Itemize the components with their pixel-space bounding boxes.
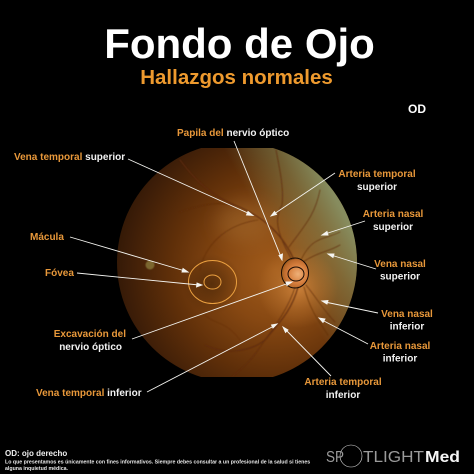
pointer arrows [70,141,378,392]
footnote: OD: ojo derecho [5,449,67,458]
label: arteria nasal inferior: inferior [383,354,417,364]
label: fovea: Fóvea [45,268,74,279]
optic disc outline [282,258,308,288]
label: arteria temporal superior: Arteria temporal [338,169,416,180]
label: vena temporal superior: Vena temporal superior [14,152,125,163]
logo: SpotlightMed [326,445,460,467]
label: arteria temporal inferior: inferior [326,390,360,401]
label: arteria nasal inferior: Arteria nasal [370,341,430,352]
label: vena nasal superior: Vena nasal [374,259,426,270]
label: arteria temporal superior: superior [357,182,397,193]
optic cup outline [288,267,304,281]
fundus photograph [117,142,357,382]
footnote: alguna inquietud médica. [5,466,69,472]
logo: SpotlightMed: TLIGHT [363,449,424,466]
fovea ring [204,275,221,289]
optic disc [284,259,308,287]
label: arteria nasal superior: superior [373,222,413,233]
eye label OD: OD [408,102,426,116]
macula ring [188,260,236,304]
logo: SpotlightMed: SP [326,449,344,466]
label: papila: Papila del nervio óptico [177,128,289,139]
label: vena nasal inferior: inferior [390,322,424,332]
footnote [5,449,310,472]
label: macula: Mácula [30,232,64,243]
label: excavacion: Excavación del [54,329,126,340]
title: Fondo de Ojo [104,20,375,67]
label: arteria nasal superior: Arteria nasal [363,209,423,220]
pale spot [146,260,154,270]
label: arteria temporal inferior: Arteria temporal [304,377,382,388]
footnote: Lo que presentamos es únicamente con fines informativos. Siempre debes consultar a un profesional de la salud si tienes [5,460,310,466]
label: vena temporal inferior: Vena temporal inferior [36,388,142,399]
blood vessels [180,150,340,351]
label: vena nasal inferior: Vena nasal [381,309,433,320]
logo: SpotlightMed: Med [425,449,460,466]
subtitle: Hallazgos normales [140,66,333,89]
label: excavacion: nervio óptico [59,342,122,353]
label: vena nasal superior: superior [380,272,420,282]
